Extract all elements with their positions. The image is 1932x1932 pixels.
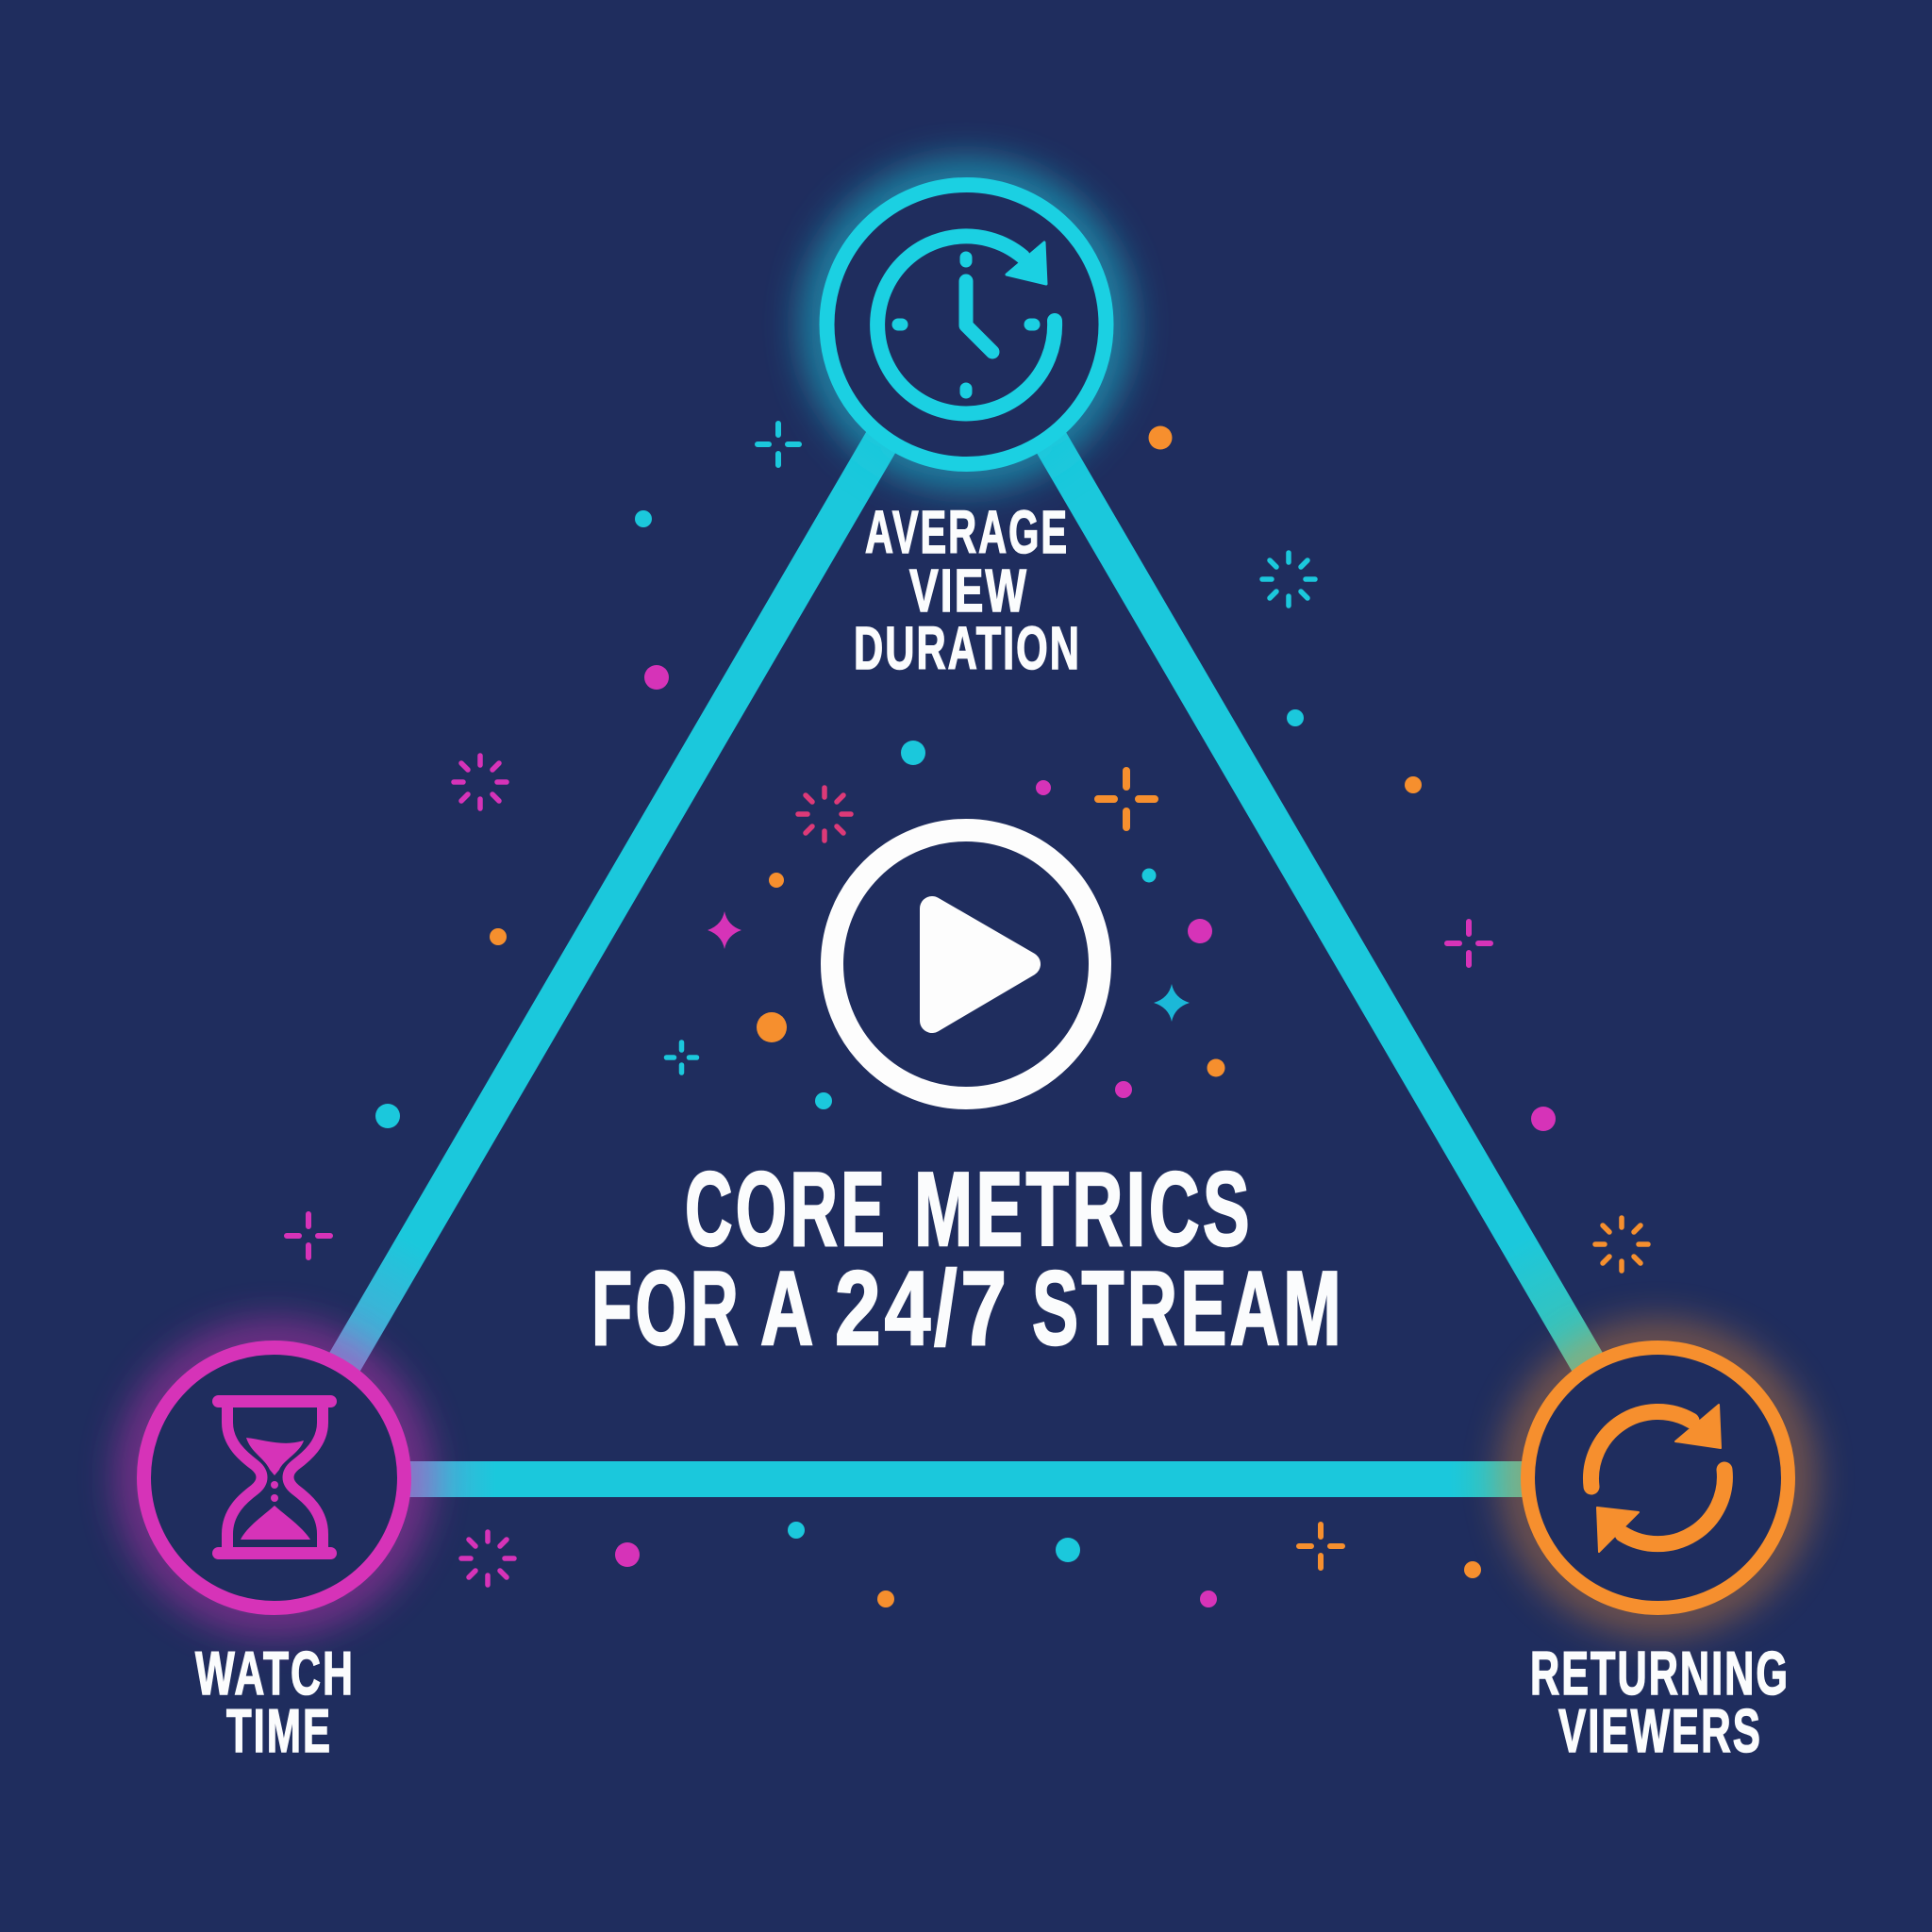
- title: [591, 1151, 1344, 1367]
- node: returning viewers: [1523, 1341, 1794, 1765]
- icon: clock with circular arrow: [877, 236, 1055, 413]
- label: average view duration: VIEW: [909, 557, 1028, 625]
- triangle connector lines: [276, 296, 1656, 1479]
- icon: hourglass: [212, 1395, 337, 1559]
- icon: refresh arrows: [1591, 1405, 1724, 1552]
- icon: play button: [832, 830, 1100, 1098]
- title: CORE: [685, 1151, 888, 1268]
- title: FOR: [591, 1250, 741, 1367]
- decorative sparkles: [708, 911, 1190, 1022]
- label: returning viewers: VIEWERS: [1558, 1696, 1762, 1765]
- label: average view duration: [854, 498, 1081, 682]
- title: METRICS: [914, 1151, 1253, 1268]
- title: A: [760, 1250, 814, 1367]
- label: average view duration: DURATION: [854, 614, 1081, 682]
- label: watch time: WATCH: [195, 1639, 355, 1707]
- title: 24/7: [835, 1250, 1010, 1367]
- node: average view duration: [823, 181, 1109, 682]
- label: returning viewers: RETURNING: [1530, 1639, 1790, 1707]
- decorative dots: [375, 426, 1556, 1607]
- decorative crosses: [287, 424, 1491, 1568]
- node: watch time: [138, 1341, 409, 1765]
- label: watch time: [195, 1639, 355, 1765]
- title: STREAM: [1032, 1250, 1344, 1367]
- label: watch time: TIME: [226, 1696, 332, 1765]
- label: returning viewers: [1530, 1639, 1790, 1765]
- label: average view duration: AVERAGE: [865, 498, 1069, 566]
- decorative bursts: [454, 553, 1648, 1585]
